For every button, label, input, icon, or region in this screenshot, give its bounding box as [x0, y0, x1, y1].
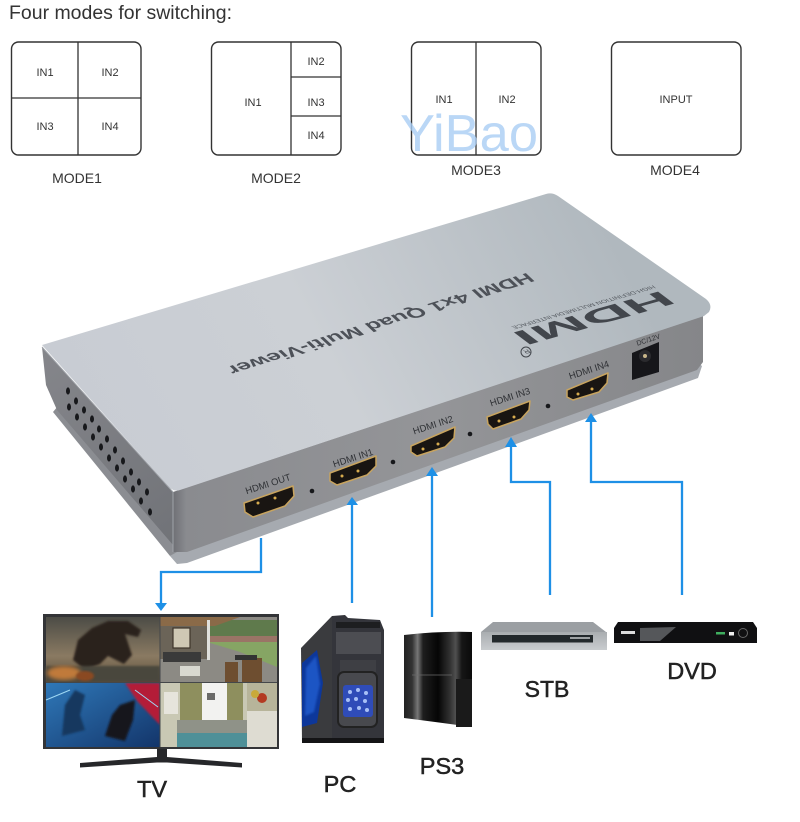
port: HDMI IN4: HDMI IN4: [568, 359, 611, 382]
icon: set-top box: [481, 622, 607, 650]
port: HDMI OUT: HDMI OUT: [244, 472, 292, 497]
label: PC: PC: [324, 771, 356, 797]
mode 3 label: MODE3: [451, 162, 501, 178]
device left lower band: [53, 406, 177, 556]
icon: PS3 console: [404, 632, 472, 727]
device name text: HDMI 4x1 Quad Multi-Viewer: [223, 270, 539, 378]
TV stand: [80, 749, 242, 768]
port: HDMI IN1: HDMI IN1: [332, 447, 375, 470]
screen 2: patio: [160, 617, 277, 682]
indicator LEDs: [310, 404, 550, 493]
TV bezel: [43, 614, 279, 749]
screen divider lines: [46, 617, 277, 747]
panel: mode 4 diagram: [612, 42, 741, 155]
screen 3: game fight: [46, 683, 160, 747]
label: DVD: DVD: [667, 658, 717, 684]
port: HDMI IN3: HDMI IN3: [489, 386, 532, 409]
icon: TV showing four inputs: [43, 614, 279, 768]
watermark: YiBao: [400, 105, 538, 163]
PC side panel: [301, 616, 334, 742]
PC base: [302, 738, 384, 743]
HDMI logo: HDMI: [504, 286, 682, 348]
label: TV: TV: [137, 776, 167, 802]
registered mark: R: [521, 348, 533, 355]
panel: mode 1 diagram: IN4: [101, 121, 119, 133]
panel: mode 2 diagram: IN1: [244, 97, 262, 109]
arrow: STB to HDMI IN3: [505, 437, 550, 595]
screen 4: nursery: [160, 683, 277, 747]
top face edges: [42, 347, 173, 552]
vent holes: [66, 387, 152, 516]
panel: mode 1 diagram: IN1: [36, 67, 54, 79]
device front face: [173, 316, 703, 552]
label: STB: STB: [525, 676, 569, 702]
panel: mode 4 diagram: INPUT: [660, 94, 693, 106]
panel: mode 1 diagram: IN3: [36, 121, 54, 133]
port: HDMI IN4: [567, 359, 611, 400]
PC glowing front window: [338, 672, 377, 727]
panel: mode 1 diagram: [12, 42, 141, 155]
device left face: [42, 347, 173, 545]
panel: mode 1 diagram: IN2: [101, 67, 119, 79]
icon: DVD player: [614, 622, 757, 643]
panel: mode 2 diagram: IN2: [307, 56, 325, 68]
PC front panel: [332, 615, 384, 742]
panel: mode 2 diagram: [212, 42, 341, 155]
screen 1: monster: [46, 617, 160, 682]
HDMI logo tagline: HIGH-DEFINITION MULTIMEDIA INTERFACE: [509, 284, 657, 330]
panel: mode 3 diagram: IN1: [435, 94, 453, 106]
device top face: [42, 193, 710, 491]
PC side window: [302, 650, 323, 727]
port: HDMI IN3: [487, 386, 532, 429]
arrow: PC to HDMI IN1: [346, 497, 358, 603]
arrow: HDMI OUT to TV: [155, 538, 261, 611]
port: HDMI IN2: [411, 414, 455, 456]
device: HDMI multi-viewer: [42, 193, 710, 564]
mode 4 label: MODE4: [650, 162, 700, 178]
device bottom lip: [170, 362, 702, 564]
port: HDMI OUT: [244, 472, 294, 517]
heading: Four modes for switching:: [9, 3, 232, 24]
port: HDMI IN2: HDMI IN2: [412, 414, 455, 437]
panel: mode 3 diagram: [412, 42, 541, 155]
power jack: DC/12V: [636, 333, 662, 348]
power jack: [632, 333, 662, 380]
mode 1 label: MODE1: [52, 170, 102, 186]
panel: mode 2 diagram: IN4: [307, 130, 325, 142]
arrow: PS3 to HDMI IN2: [426, 467, 438, 617]
port: HDMI IN1: [330, 447, 376, 485]
panel: mode 3 diagram: IN2: [498, 94, 516, 106]
icon: PC tower: [301, 615, 384, 743]
panel: mode 2 diagram: IN3: [307, 97, 325, 109]
arrow: DVD to HDMI IN4: [585, 413, 682, 595]
mode 2 label: MODE2: [251, 170, 301, 186]
label: PS3: PS3: [420, 753, 464, 779]
